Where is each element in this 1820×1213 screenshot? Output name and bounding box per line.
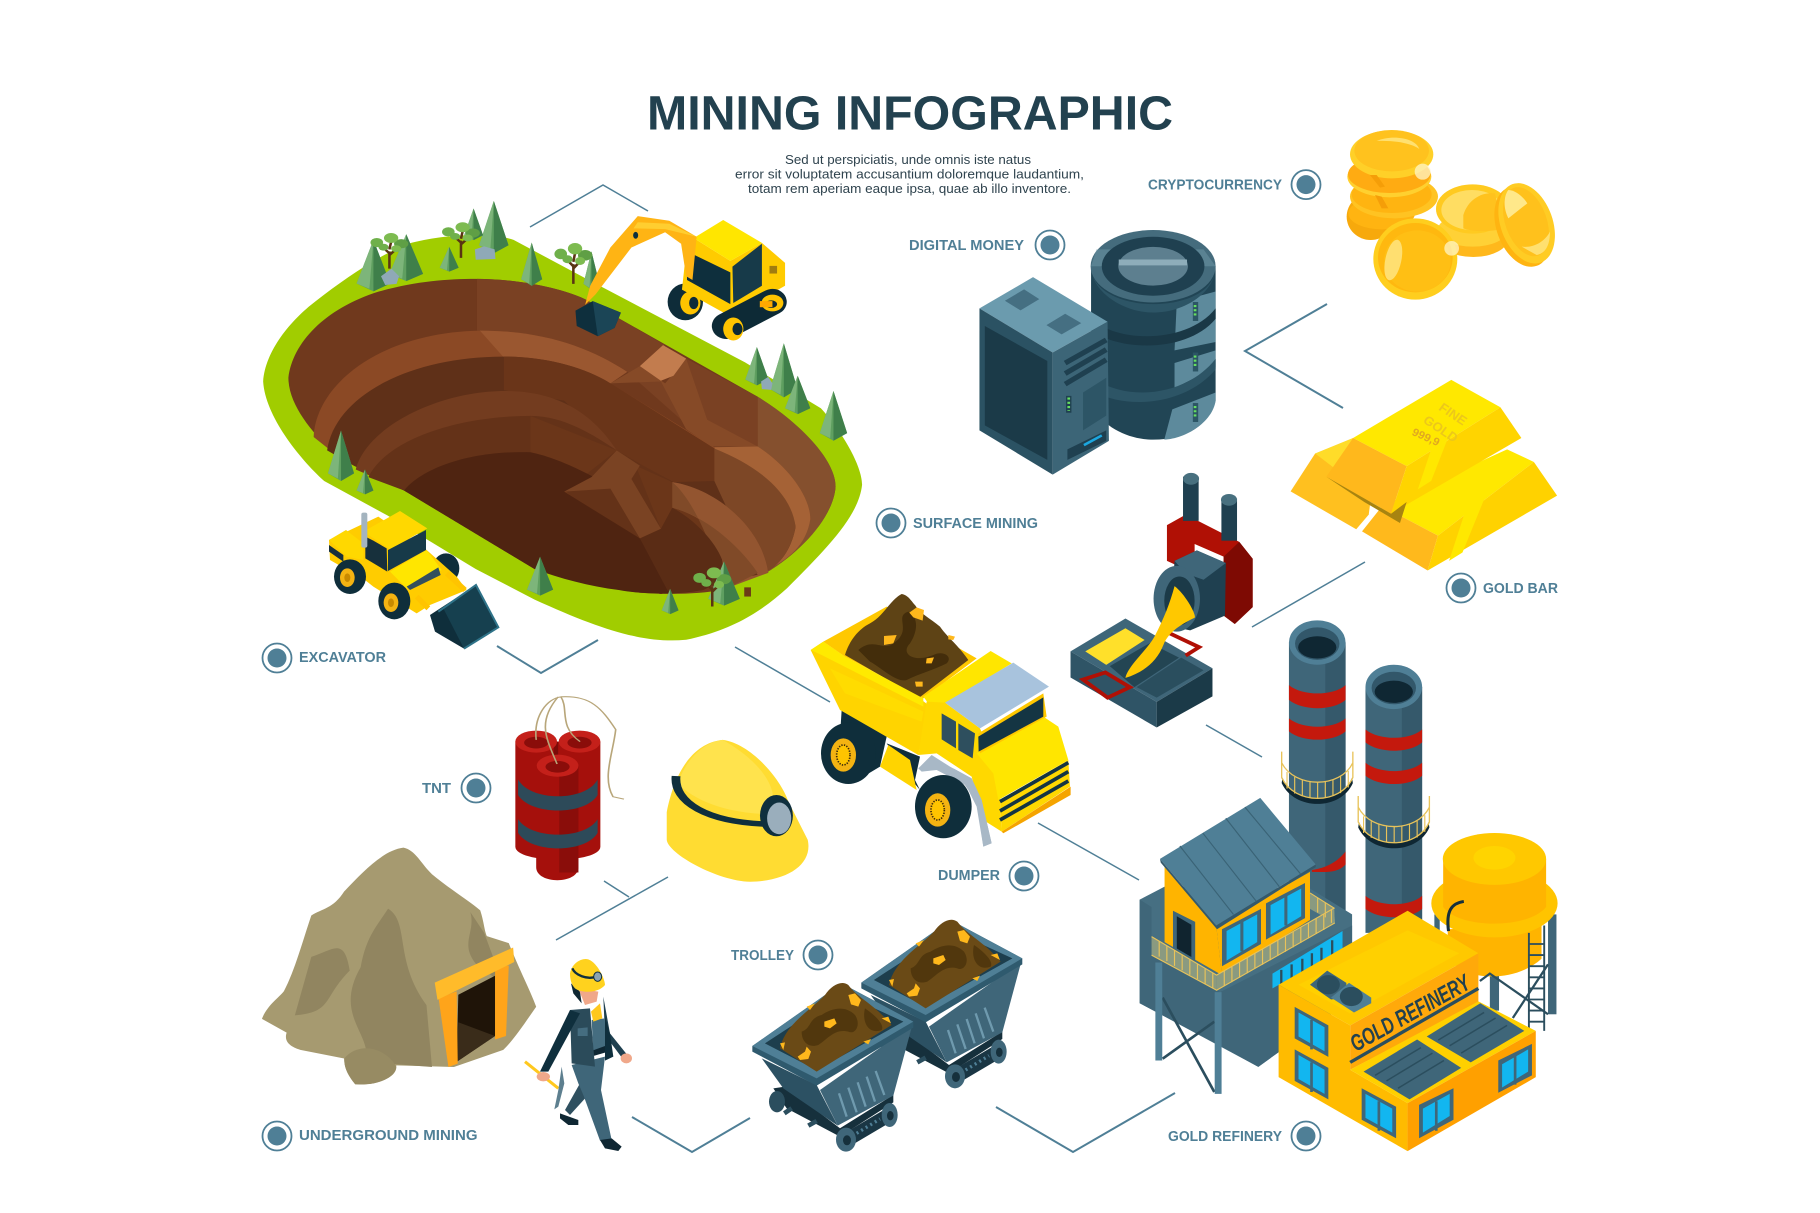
smelting furnace and mould (1071, 473, 1253, 728)
label: cryptocurrency: CRYPTOCURRENCY (1148, 178, 1282, 194)
storage cylinder (1091, 230, 1216, 440)
standing coin (1484, 175, 1565, 275)
lower right bar (1362, 449, 1557, 571)
label: excavator: EXCAVATOR (299, 650, 387, 666)
label: digital money: DIGITAL MONEY (909, 238, 1024, 254)
label: tnt (422, 774, 490, 802)
gold refinery block: GOLD REFINERY (1345, 968, 1476, 1057)
top bar (1315, 380, 1521, 523)
grey building with house (1140, 798, 1352, 1094)
cryptocurrency coins (1347, 130, 1565, 300)
balcony railing (1152, 893, 1335, 990)
label: underground mining: UNDERGROUND MINING (299, 1128, 478, 1144)
top bar: 999,9 (1410, 427, 1441, 449)
label: tnt: TNT (422, 781, 451, 797)
front wheel and fender (915, 755, 992, 847)
miner figure (525, 959, 632, 1151)
label: underground mining (262, 1122, 478, 1150)
label: excavator (262, 644, 387, 672)
front loader (329, 511, 498, 649)
crucible (1154, 550, 1226, 632)
surface mining pit (263, 201, 862, 640)
molten gold pour (1125, 586, 1195, 678)
label: digital money (909, 230, 1064, 260)
pit terraces (288, 279, 836, 594)
intro text: Sed ut perspiciatis, unde omnis iste natus (785, 153, 1031, 167)
title: MINING INFOGRAPHIC (647, 88, 1173, 140)
excavator on pit edge (575, 216, 785, 341)
intro text: totam rem aperiam eaque ipsa, quae ab illo inventore. (748, 182, 1071, 196)
top bar: GOLD (1421, 412, 1461, 445)
rear wheel (821, 710, 887, 784)
dump bed (811, 642, 928, 755)
intro text: error sit voluptatem accusantium doloremque laudantium, (735, 168, 1084, 182)
lying coins (1436, 184, 1509, 257)
underground mine mountain (262, 848, 536, 1084)
cab and hood (918, 651, 1071, 833)
front coin (1373, 218, 1459, 300)
label: gold refinery: GOLD REFINERY (1168, 1129, 1282, 1145)
gold refinery (1140, 620, 1558, 1151)
label: trolley: TROLLEY (731, 948, 794, 964)
label: dumper: DUMPER (938, 868, 1001, 884)
mould tray (1071, 619, 1212, 728)
server rack (979, 277, 1109, 475)
top bar: FINE (1436, 400, 1470, 428)
coin stack (1347, 130, 1438, 240)
red frame (1167, 473, 1253, 624)
chimneys (1282, 620, 1429, 933)
gold refinery block (1279, 911, 1536, 1151)
label: trolley (731, 940, 832, 970)
connector lines (497, 185, 1365, 1152)
trees around pit (328, 201, 847, 614)
grass rim (263, 235, 862, 640)
mine entrance (435, 948, 514, 1067)
label: gold bar: GOLD BAR (1483, 581, 1558, 597)
label: gold bar (1446, 574, 1558, 602)
miner helmet (667, 740, 808, 882)
label: dumper (938, 862, 1038, 890)
label: surface mining: SURFACE MINING (913, 516, 1038, 532)
lower left bar (1291, 438, 1373, 529)
gold bars (1291, 380, 1557, 571)
label: gold refinery (1168, 1122, 1320, 1150)
water tower (1431, 833, 1558, 1031)
label: cryptocurrency (1148, 170, 1320, 199)
digital money servers (979, 230, 1216, 475)
dump truck (811, 594, 1071, 847)
ore load (823, 594, 977, 698)
label: surface mining (876, 508, 1038, 538)
TNT bundle (515, 697, 624, 880)
intro text (735, 153, 1084, 196)
mine trolleys (752, 920, 1022, 1152)
